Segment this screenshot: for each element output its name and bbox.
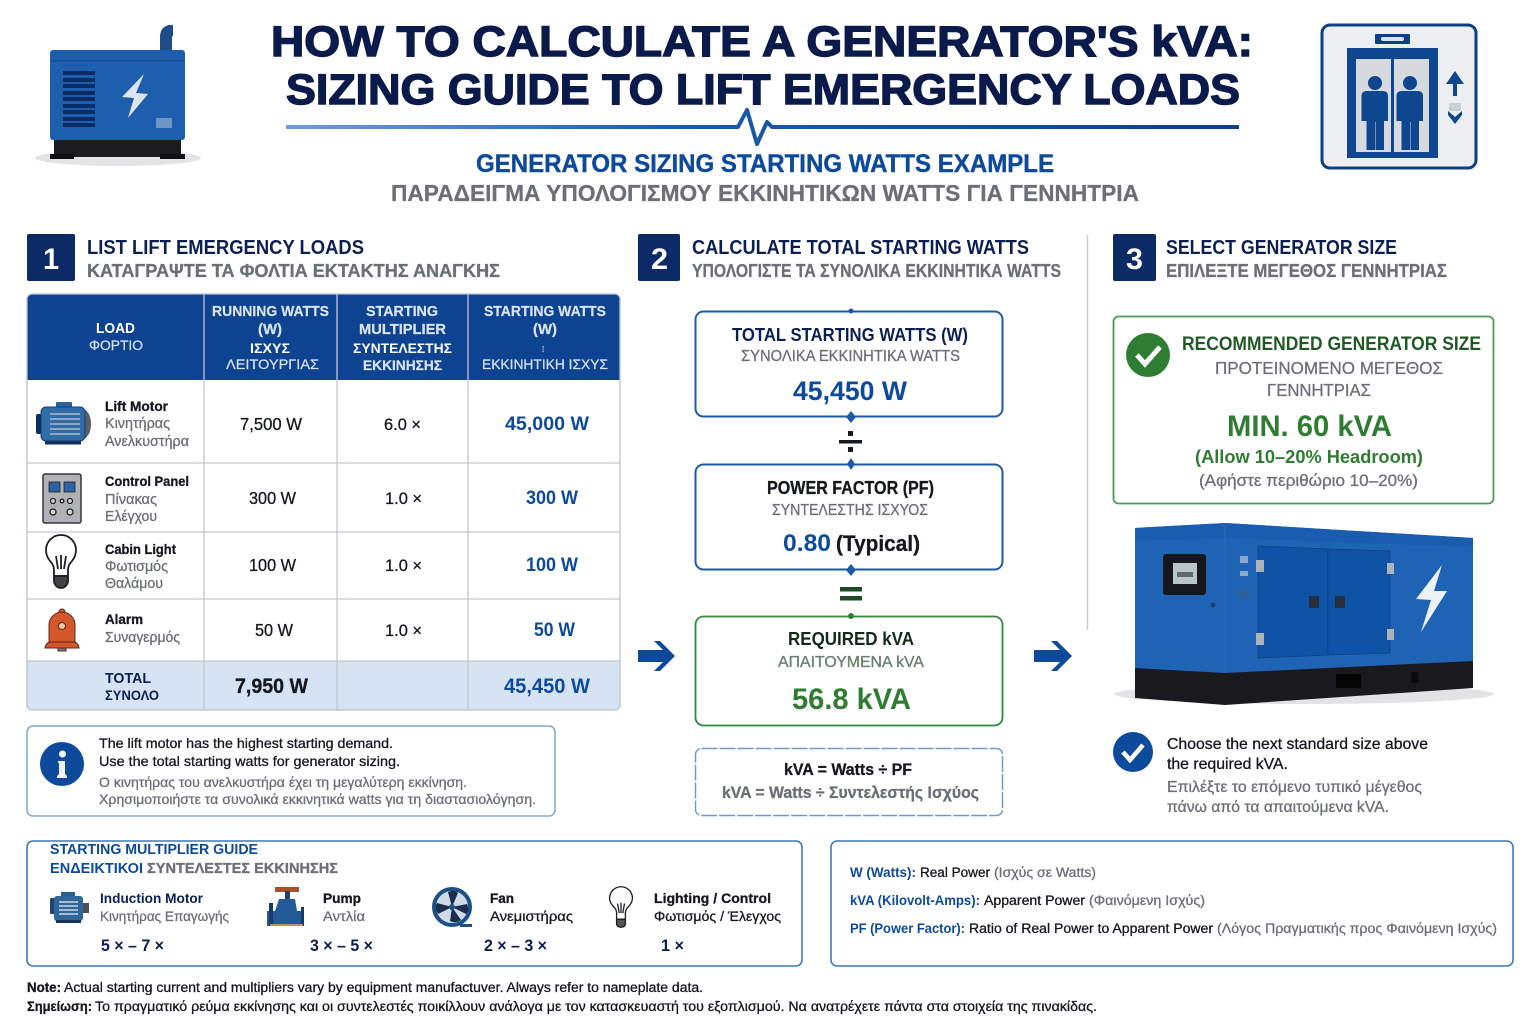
table header: STARTING: [366, 304, 438, 320]
symbol: equals: [840, 587, 862, 600]
callout: lift motor note: Ο κινητήρας του ανελκυστήρα έχει τη μεγαλύτερη εκκίνηση.: [99, 774, 467, 790]
row: alarm: 1.0 ×: [385, 621, 422, 640]
guide: pump: Αντλία: [323, 908, 365, 924]
panel: total starting watts: [696, 308, 1002, 423]
panel: formula: [696, 748, 1002, 816]
panel: formula: kVA = Watts ÷ PF: [784, 761, 912, 779]
table header: STARTING WATTS: [484, 304, 606, 320]
row: control panel: [43, 473, 578, 525]
advice: next standard size: Επιλέξτε το επόμενο τυπικό μέγεθος: [1167, 779, 1422, 796]
panel: definitions: W (Watts):: [850, 865, 916, 880]
row: control panel: 300 W: [249, 488, 296, 508]
table header: (W): [533, 322, 557, 338]
panel: definitions: (Ισχύς σε Watts): [994, 865, 1096, 880]
row: cabin light: Θαλάμου: [105, 576, 163, 592]
row: alarm: 50 W: [534, 620, 575, 641]
panel: definitions: PF (Power Factor):: [850, 921, 965, 936]
panel: required kVA: ΑΠΑΙΤΟΥΜΕΝΑ kVA: [778, 654, 925, 671]
table header: ΛΕΙΤΟΥΡΓΙΑΣ: [226, 356, 319, 372]
subtitle: ΠΑΡΑΔΕΙΓΜΑ ΥΠΟΛΟΓΙΣΜΟΥ ΕΚΚΙΝΗΤΙΚΩΝ WATTS ΓΙΑ ΓΕΝΝΗΤΡΙΑ: [391, 180, 1139, 206]
row: lift motor: 7,500 W: [240, 414, 302, 434]
callout: lift motor note: Use the total starting watts for generator sizing.: [99, 753, 400, 769]
panel: power factor: [696, 458, 1002, 576]
row: cabin light: 100 W: [526, 555, 578, 576]
divider: heartbeat rule: [286, 110, 1239, 144]
table header: MULTIPLIER: [359, 322, 447, 338]
panel: starting multiplier guide: ΕΝΔΕΙΚΤΙΚΟΙ: [50, 861, 143, 877]
title: SIZING GUIDE TO LIFT EMERGENCY LOADS: [286, 66, 1240, 114]
row: alarm: Alarm: [105, 611, 143, 627]
row: lift motor: [36, 398, 589, 450]
row: total: ΣΥΝΟΛΟ: [105, 687, 159, 703]
row: cabin light: 100 W: [249, 555, 296, 575]
row: alarm: [45, 609, 575, 651]
footnote: Το πραγματικό ρεύμα εκκίνησης και οι συντελεστές ποικίλλουν ανάλογα με τον κατασκευαστή του εξοπλισμού. Να ανατρέχετε πάντα στα στοιχεία της πινακίδας.: [95, 999, 1097, 1014]
panel: required kVA: REQUIRED kVA: [788, 629, 914, 649]
row: control panel: 300 W: [526, 488, 578, 509]
icon: small generator: [35, 25, 201, 166]
symbol: divide: [839, 431, 862, 452]
panel: starting multiplier guide: [27, 841, 802, 966]
row: total: 45,450 W: [504, 675, 590, 698]
callout: lift motor note: [27, 726, 555, 816]
step 3 heading: [1113, 234, 1447, 281]
advice: next standard size: Choose the next standard size above: [1167, 736, 1428, 753]
panel: definitions: (Φαινόμενη Ισχύς): [1089, 893, 1205, 908]
panel: recommended size: (Αφήστε περιθώριο 10–20%): [1199, 471, 1418, 490]
guide: fan: 2 × – 3 ×: [484, 937, 547, 955]
icon: fan: [434, 889, 472, 927]
guide: pump: Pump: [323, 890, 361, 906]
row: cabin light: Φωτισμός: [105, 559, 168, 575]
panel: definitions: Ratio of Real Power to Apparent Power: [969, 921, 1214, 936]
row: lift motor: Ανελκυστήρα: [105, 434, 189, 450]
panel: recommended size: MIN. 60 kVA: [1227, 410, 1392, 443]
row: control panel: 1.0 ×: [385, 489, 422, 508]
step 1 heading: LIST LIFT EMERGENCY LOADS: [87, 237, 364, 259]
step 3 heading: 3: [1126, 243, 1143, 276]
row: lift motor: Κινητήρας: [105, 416, 170, 432]
row: lift motor: 45,000 W: [505, 414, 589, 435]
guide: induction motor: Induction Motor: [100, 890, 204, 906]
step 2 heading: [638, 234, 1061, 281]
row: total: [105, 670, 590, 703]
panel: recommended size: ΓΕΝΝΗΤΡΙΑΣ: [1267, 380, 1371, 400]
panel: power factor: 0.80: [783, 530, 831, 557]
arrow: table to calculation: [638, 641, 675, 671]
row: alarm: 50 W: [255, 620, 293, 640]
row: cabin light: Cabin Light: [105, 541, 176, 557]
panel: starting multiplier guide: ΣΥΝΤΕΛΕΣΤΕΣ ΕΚΚΙΝΗΣΗΣ: [147, 861, 338, 877]
callout: lift motor note: Χρησιμοποιήστε τα συνολικά εκκινητικά watts για τη διαστασιολόγηση.: [99, 791, 536, 807]
guide: pump: [267, 887, 373, 955]
icon: pump: [267, 887, 304, 926]
illustration: large generator: [1114, 523, 1494, 705]
subtitle: GENERATOR SIZING STARTING WATTS EXAMPLE: [476, 150, 1054, 178]
panel: definitions: [831, 841, 1513, 966]
panel: power factor: POWER FACTOR (PF): [767, 478, 934, 498]
panel: definitions: (Λόγος Πραγματικής προς Φαινόμενη Ισχύς): [1217, 921, 1497, 936]
icon: light bulb: [46, 535, 76, 588]
guide: fan: [434, 889, 573, 955]
row: total: 7,950 W: [235, 675, 308, 698]
footnote: Σημείωση:: [27, 999, 92, 1014]
table header: RUNNING WATTS: [212, 304, 329, 320]
icon: blue check: [1113, 732, 1153, 772]
row: control panel: Πίνακας: [105, 492, 157, 508]
panel: formula: kVA = Watts ÷ Συντελεστής Ισχύος: [722, 784, 979, 802]
icon: green check: [1126, 333, 1170, 377]
panel: definitions: Apparent Power: [984, 893, 1086, 908]
step 1 heading: [27, 234, 500, 281]
step 3 heading: SELECT GENERATOR SIZE: [1166, 237, 1397, 259]
row: lift motor: Lift Motor: [105, 398, 169, 414]
row: cabin light: 1.0 ×: [385, 556, 422, 575]
advice: next standard size: πάνω από τα απαιτούμενα kVA.: [1167, 799, 1389, 816]
panel: total starting watts: TOTAL STARTING WATTS (W): [732, 325, 968, 345]
footnote: [27, 980, 1097, 1014]
panel: power factor: (Typical): [836, 531, 920, 556]
table header: ΙΣΧΥΣ: [250, 340, 290, 356]
panel: definitions: kVA (Kilovolt-Amps):: [850, 893, 980, 908]
guide: fan: Ανεμιστήρας: [490, 908, 573, 924]
panel: required kVA: [696, 613, 1002, 726]
icon: control panel: [43, 474, 81, 523]
panel: starting multiplier guide: STARTING MULTIPLIER GUIDE: [50, 842, 258, 858]
row: total: TOTAL: [105, 670, 151, 687]
callout: lift motor note: The lift motor has the highest starting demand.: [99, 735, 393, 751]
panel: total starting watts: 45,450 W: [793, 376, 907, 406]
advice: next standard size: [1113, 732, 1428, 816]
icon: alarm bell: [45, 609, 79, 651]
guide: lighting and control: Φωτισμός / Έλεγχος: [654, 908, 781, 924]
row: lift motor: 6.0 ×: [384, 415, 421, 434]
table header: ΦΟΡΤΙΟ: [89, 337, 143, 353]
icon: induction motor: [50, 892, 89, 923]
icon: lift motor: [36, 402, 91, 444]
step 2 heading: ΥΠΟΛΟΓΙΣΤΕ ΤΑ ΣΥΝΟΛΙΚΑ ΕΚΚΙΝΗΤΙΚΑ WATTS: [692, 261, 1061, 281]
table header: (W): [258, 322, 282, 338]
panel: required kVA: 56.8 kVA: [792, 683, 911, 716]
icon: info: [40, 742, 84, 786]
icon: bulb: [610, 887, 632, 927]
row: cabin light: [46, 535, 578, 592]
table header: [89, 304, 608, 373]
panel: recommended size: ΠΡΟΤΕΙΝΟΜΕΝΟ ΜΕΓΕΘΟΣ: [1215, 358, 1443, 378]
table header: ΕΚΚΙΝΗΣΗΣ: [363, 357, 442, 373]
row: alarm: Συναγερμός: [105, 630, 180, 646]
guide: induction motor: 5 × – 7 ×: [101, 937, 164, 955]
table header: LOAD: [96, 321, 135, 337]
advice: next standard size: the required kVA.: [1167, 756, 1288, 773]
guide: induction motor: [50, 890, 229, 955]
title: [271, 18, 1253, 114]
row: control panel: Control Panel: [105, 473, 189, 489]
panel: load table: [27, 294, 620, 710]
row: control panel: Ελέγχου: [105, 509, 157, 525]
step 2 heading: 2: [651, 243, 668, 276]
panel: recommended size: (Allow 10–20% Headroom): [1195, 446, 1423, 467]
guide: fan: Fan: [490, 890, 514, 906]
step 1 heading: ΚΑΤΑΓΡΑΨΤΕ ΤΑ ΦΟΛΤΙΑ ΕΚΤΑΚΤΗΣ ΑΝΑΓΚΗΣ: [87, 261, 500, 281]
guide: lighting and control: 1 ×: [661, 937, 684, 955]
guide: lighting and control: [610, 887, 781, 955]
footnote: Actual starting current and multipliers vary by equipment manufactuver. Always refer to nameplate data.: [64, 980, 703, 995]
guide: lighting and control: Lighting / Control: [654, 890, 771, 906]
panel: recommended size: [1114, 316, 1494, 504]
arrow: calculation to selection: [1034, 641, 1072, 671]
title: HOW TO CALCULATE A GENERATOR'S kVA:: [271, 18, 1253, 66]
guide: induction motor: Κινητήρας Επαγωγής: [100, 908, 229, 924]
table header: ΣΥΝΤΕΛΕΣΤΗΣ: [353, 340, 452, 356]
icon: lift with passengers: [1322, 25, 1476, 168]
table header: ⁞: [542, 345, 544, 354]
table header: ΕΚΚΙΝΗΤΙΚΗ ΙΣΧΥΣ: [482, 356, 608, 372]
panel: power factor: ΣΥΝΤΕΛΕΣΤΗΣ ΙΣΧΥΟΣ: [772, 502, 928, 519]
panel: definitions: Real Power: [920, 865, 991, 880]
step 2 heading: CALCULATE TOTAL STARTING WATTS: [692, 237, 1029, 259]
footnote: Note:: [27, 980, 61, 995]
step 1 heading: 1: [43, 243, 59, 276]
step 3 heading: ΕΠΙΛΕΞΤΕ ΜΕΓΕΘΟΣ ΓΕΝΝΗΤΡΙΑΣ: [1166, 261, 1447, 281]
panel: total starting watts: ΣΥΝΟΛΙΚΑ ΕΚΚΙΝΗΤΙΚΑ WATTS: [741, 348, 960, 365]
panel: recommended size: RECOMMENDED GENERATOR SIZE: [1182, 334, 1481, 355]
subtitle: [391, 150, 1139, 206]
guide: pump: 3 × – 5 ×: [310, 937, 373, 955]
